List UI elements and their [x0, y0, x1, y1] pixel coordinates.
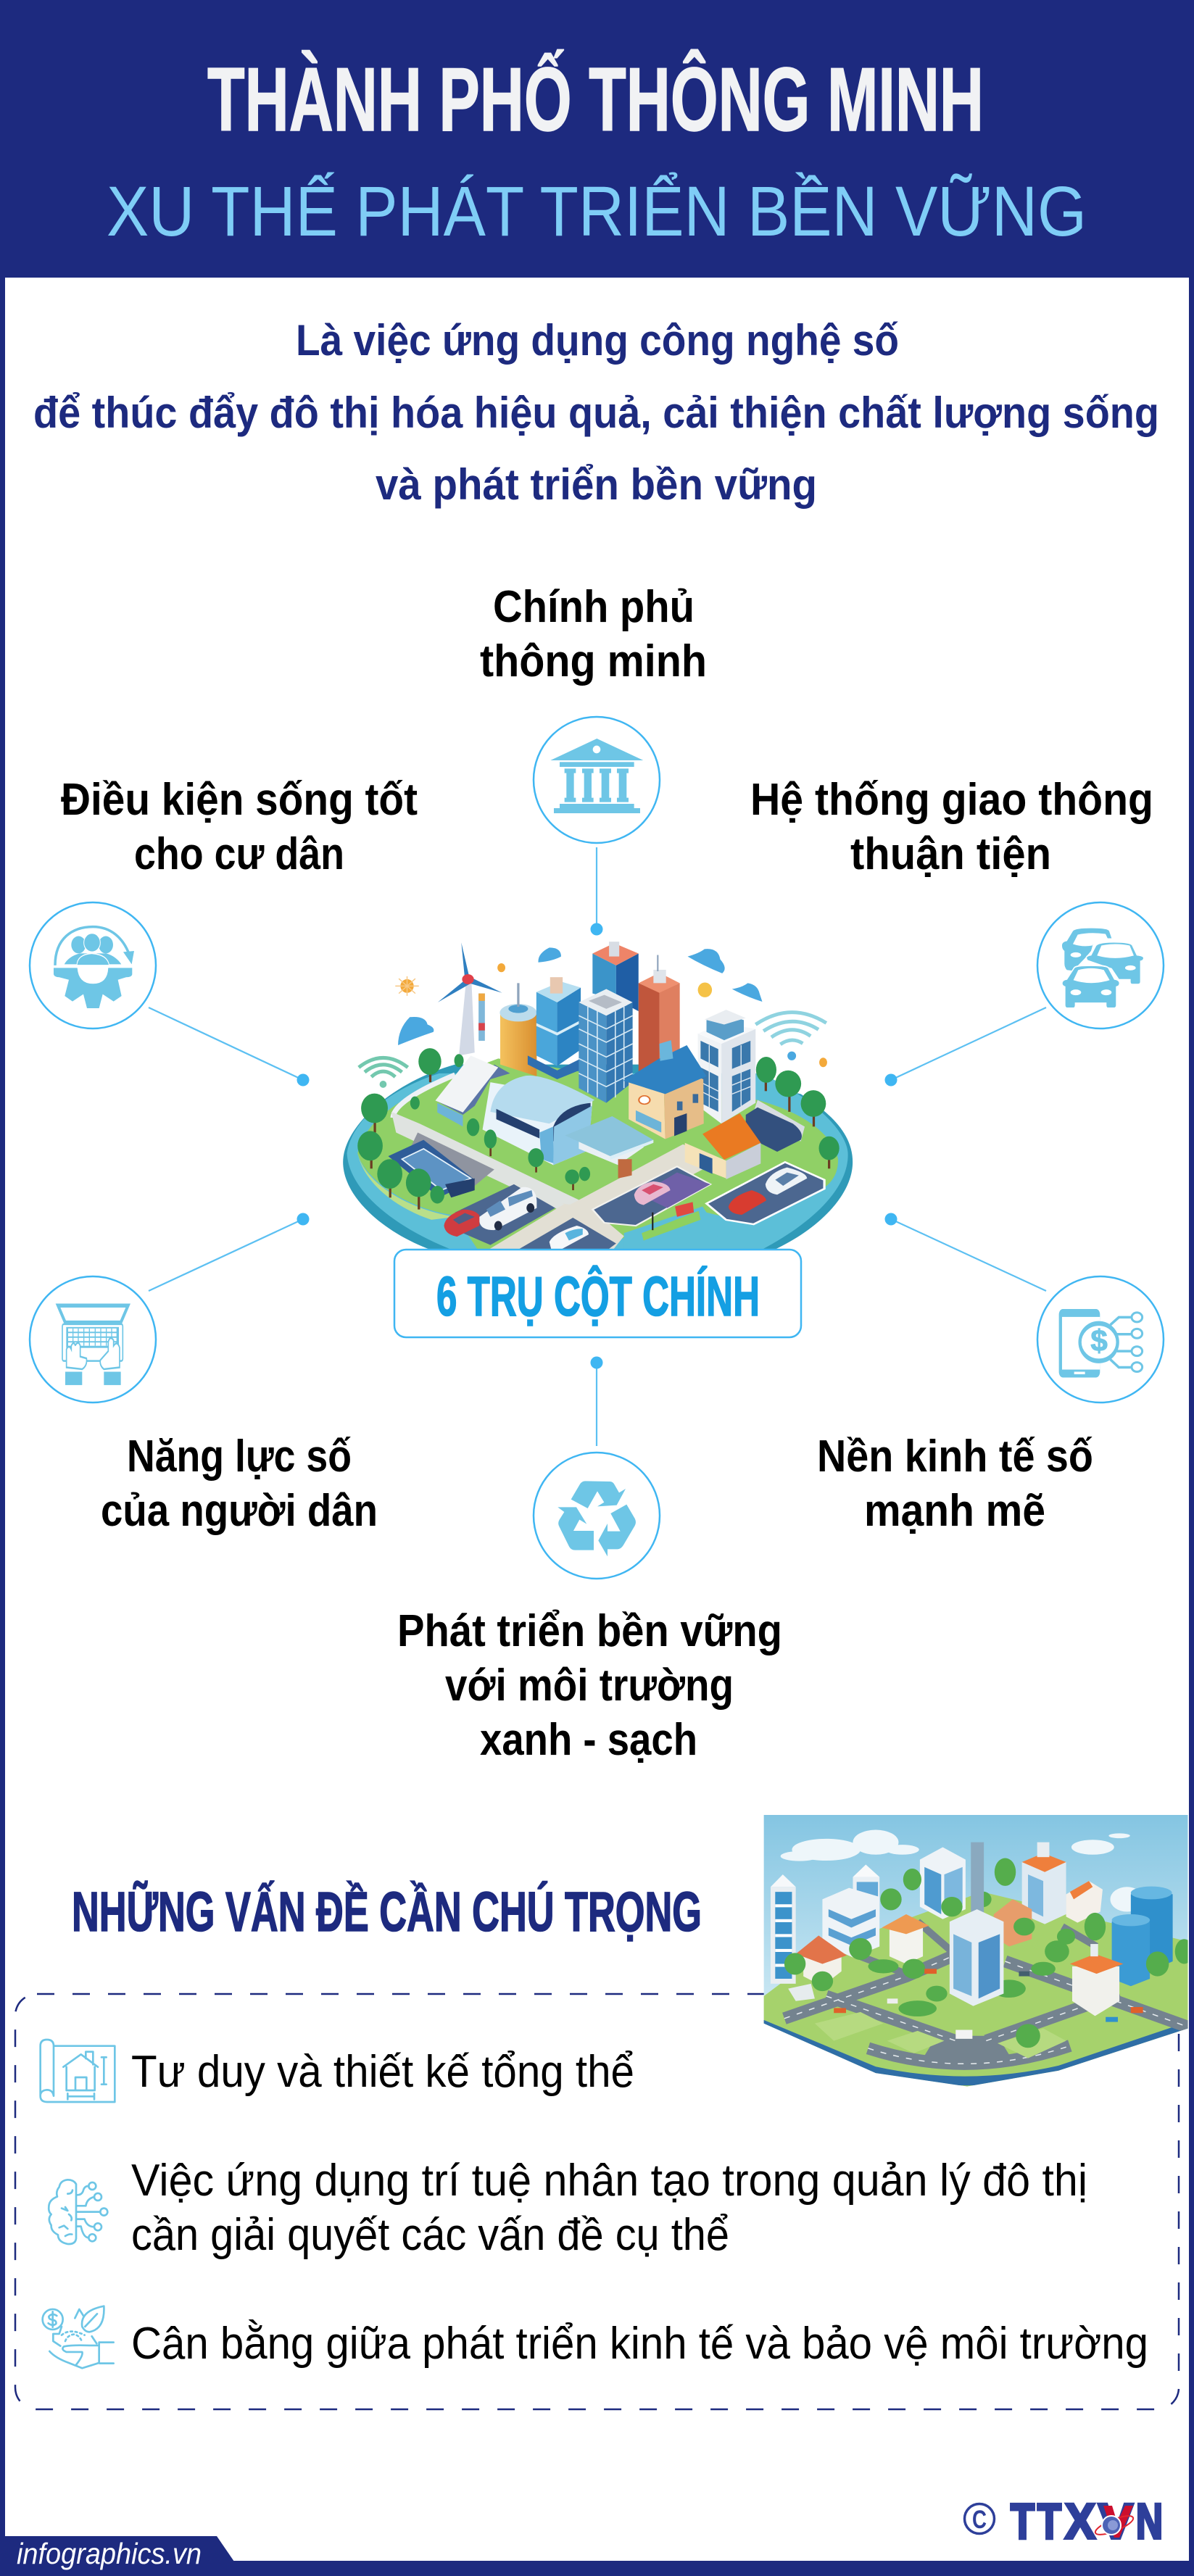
globe [1093, 2512, 1135, 2538]
footer source text: infographics.vn [17, 2537, 202, 2570]
icon: AI brain [49, 2180, 107, 2244]
blue tower [528, 977, 586, 1079]
pillar label: digital capacity: Năng lực số [127, 1432, 352, 1482]
pillar label: digital economy [817, 1432, 1093, 1536]
logo wordmark: V [1098, 2493, 1133, 2549]
clouds [398, 947, 762, 1045]
pillar label: digital capacity: của người dân [101, 1486, 378, 1536]
orange cylinder tower [499, 983, 536, 1076]
logo wordmark [1011, 2493, 1163, 2549]
pillar label: sustainable development: Phát triển bền vững [397, 1606, 782, 1656]
pillar label: living conditions: Điều kiện sống tốt [61, 775, 418, 825]
logo wordmark: X [1065, 2493, 1095, 2549]
orange roof house [685, 1113, 760, 1179]
logo wordmark: T [1037, 2493, 1061, 2549]
intro text: và phát triển bền vững [376, 460, 817, 509]
roads [391, 1075, 805, 1251]
blue roof house [623, 1040, 707, 1139]
pillar label: sustainable development: xanh - sạch [480, 1715, 697, 1765]
pillar label: living conditions: cho cư dân [134, 829, 344, 879]
small cars [834, 1969, 1143, 2039]
list item text: Cân bằng giữa phát triển kinh tế và bảo vệ môi trường [131, 2319, 1148, 2369]
sky [764, 1815, 1188, 2028]
icon: laptop and hands [30, 1276, 156, 1403]
icon: people and gear [30, 902, 156, 1029]
list item text: cần giải quyết các vấn đề cụ thể [131, 2210, 729, 2260]
wifi signals [359, 1013, 826, 1088]
white tower [698, 1010, 755, 1123]
glass tower [579, 989, 633, 1103]
icon: house blueprint [41, 2040, 115, 2102]
blue right towers [1112, 1887, 1173, 1986]
orange top building [1022, 1842, 1103, 1924]
brick tower [639, 955, 680, 1076]
curved glass hall [483, 1076, 594, 1165]
logo wordmark: T [1011, 2493, 1035, 2549]
red V [1103, 2506, 1133, 2538]
pillar label: smart government: Chính phủ [493, 582, 695, 632]
parking lots [455, 1108, 824, 1251]
icon: digital money phone [1037, 1276, 1164, 1403]
canopy shop [565, 1116, 653, 1179]
city illustration: top right [764, 1815, 1193, 2087]
subtitle: XU THẾ PHÁT TRIỂN BỀN VỮNG [107, 172, 1087, 251]
icon: recycle [534, 1453, 660, 1579]
ground [764, 1892, 1188, 2087]
list item text [131, 2047, 1148, 2369]
trees [357, 1048, 839, 1210]
small houses [796, 1899, 1123, 2016]
icon: economy and environment [43, 2306, 114, 2368]
footer tab [0, 2536, 234, 2576]
pillar label: transport: Hệ thống giao thông [750, 775, 1153, 825]
clouds [781, 1830, 1144, 1912]
back building [920, 1847, 966, 1919]
wind turbine [438, 942, 502, 1055]
pillar label: digital economy: mạnh mẽ [864, 1486, 1045, 1536]
stepped white towers [822, 1864, 879, 1958]
base edge [764, 2020, 1188, 2085]
solar canopy [389, 1140, 475, 1197]
suns [395, 963, 827, 1067]
white barn [436, 1055, 510, 1126]
copyright mark [964, 2504, 995, 2534]
intro text: Là việc ứng dụng công nghệ số [296, 316, 899, 365]
pillar label: sustainable development [397, 1606, 782, 1765]
list item text: Việc ứng dụng trí tuệ nhân tạo trong quản lý đô thị [131, 2156, 1087, 2206]
TTXVN logo [964, 2493, 1163, 2549]
street sign [642, 1202, 700, 1240]
cars [444, 1168, 807, 1250]
pillar label: digital economy: Nền kinh tế số [817, 1432, 1093, 1482]
pillars callout [394, 1250, 801, 1337]
icon: government building [534, 717, 660, 843]
trees [784, 1858, 1193, 2048]
island base [343, 1058, 853, 1257]
dashed list panel [15, 1994, 1179, 2409]
section heading: NHỮNG VẤN ĐỀ CẦN CHÚ TRỌNG [72, 1879, 702, 1943]
pillar label: living conditions [61, 775, 418, 879]
central city illustration [343, 942, 853, 1257]
dollar sign: $ [1090, 1324, 1108, 1358]
pillar label: smart government [480, 582, 707, 686]
logo wordmark: N [1136, 2493, 1163, 2549]
list item text: Tư duy và thiết kế tổng thể [131, 2047, 634, 2097]
pillar label: transport: thuận tiện [850, 829, 1051, 879]
grass islands [815, 2012, 1066, 2058]
pillar label: sustainable development: với môi trường [445, 1661, 734, 1711]
intro text [33, 316, 1159, 509]
copyright mark: C [972, 2506, 987, 2534]
cylinder tower [771, 1874, 796, 1984]
roads [784, 1921, 1188, 2064]
pillar label: smart government: thông minh [480, 636, 707, 686]
pillar label: transport [750, 775, 1153, 879]
callout text: 6 TRỤ CỘT CHÍNH [436, 1265, 760, 1328]
road markings [784, 1956, 1188, 2064]
connector lines and dots [149, 847, 1046, 1446]
central tower [950, 1842, 1003, 2006]
pillar label: digital capacity [101, 1432, 378, 1536]
icon: cars [1037, 902, 1164, 1029]
back tower [592, 942, 639, 1011]
